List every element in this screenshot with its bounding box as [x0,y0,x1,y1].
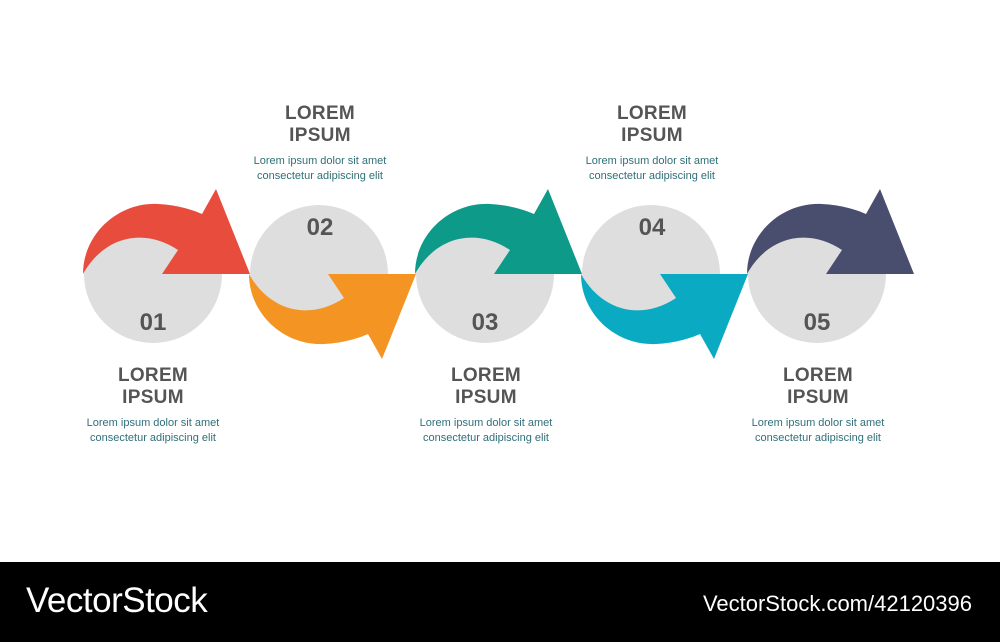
text block 1: Lorem ipsum dolor sit amet [87,417,219,429]
text block 1: consectetur adipiscing elit [90,432,216,444]
text block 4: IPSUM [621,125,683,146]
text block 4: LOREM [617,103,687,124]
text block 3: Lorem ipsum dolor sit amet [420,417,552,429]
footer band [0,562,1000,642]
step 4 [581,205,748,359]
text block 5: IPSUM [787,387,849,408]
text block 2: Lorem ipsum dolor sit amet [254,155,386,167]
step 2: 02 [307,214,333,241]
text block 5 [752,365,884,444]
footer url: VectorStock.com/42120396 [703,591,972,616]
text block 3 [420,365,552,444]
step 5 [747,189,914,343]
text block 5: consectetur adipiscing elit [755,432,881,444]
step 4: 04 [639,214,666,241]
text block 2 [254,103,386,182]
text block 3: IPSUM [455,387,517,408]
step 5: 05 [804,309,830,336]
text block 2: consectetur adipiscing elit [257,170,383,182]
text block 2: IPSUM [289,125,351,146]
text block 2: LOREM [285,103,355,124]
text block 1: LOREM [118,365,188,386]
text block 3: consectetur adipiscing elit [423,432,549,444]
step 3: 03 [472,309,498,336]
text block 1: IPSUM [122,387,184,408]
step 2 [249,205,416,359]
text block 4: consectetur adipiscing elit [589,170,715,182]
footer logo: VectorStock [26,581,207,620]
step 1 [83,189,250,343]
text block 4: Lorem ipsum dolor sit amet [586,155,718,167]
step 3 [415,189,582,343]
text block 4 [586,103,718,182]
text block 1 [87,365,220,444]
text block 5: Lorem ipsum dolor sit amet [752,417,884,429]
text block 3: LOREM [451,365,521,386]
text block 5: LOREM [783,365,853,386]
step 1: 01 [140,309,166,336]
